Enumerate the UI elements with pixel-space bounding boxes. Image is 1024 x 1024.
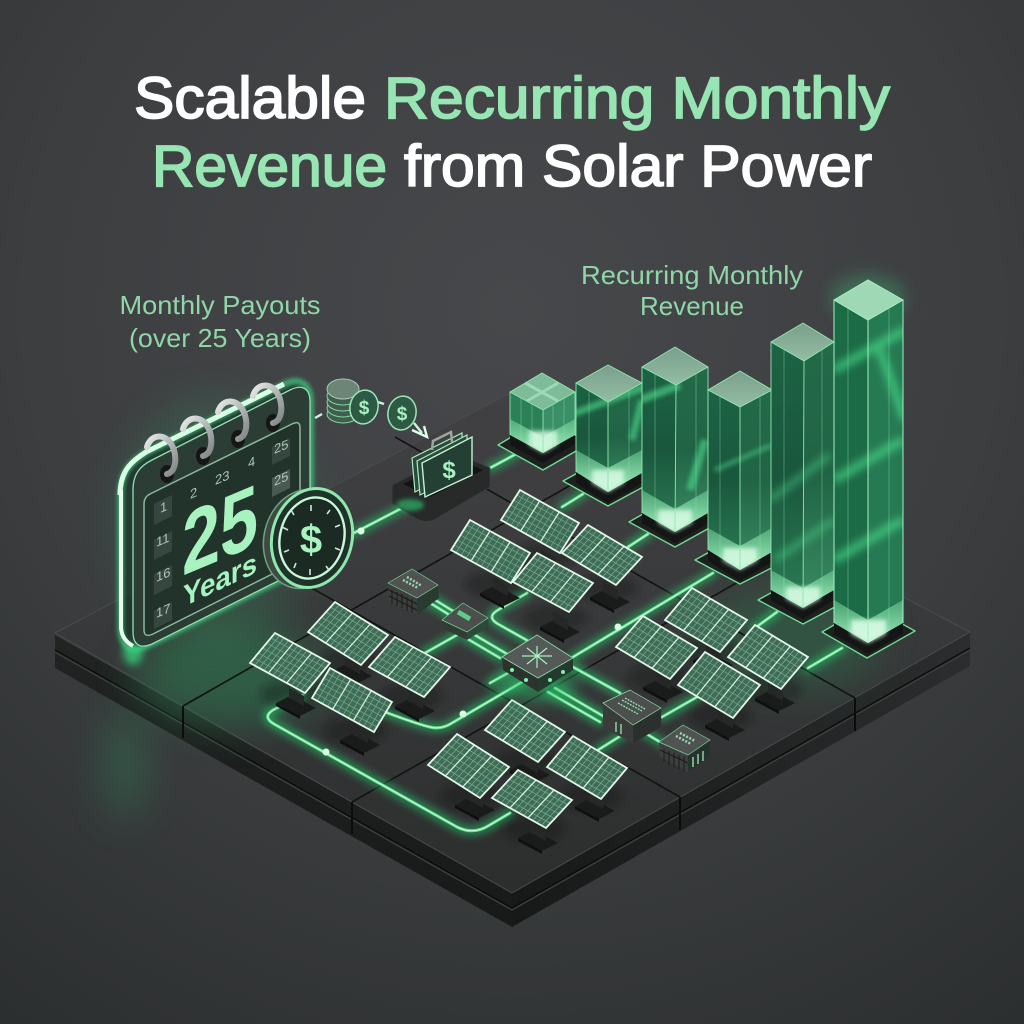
box: inverter B <box>442 603 488 640</box>
title: Revenue <box>152 134 387 199</box>
bar 5 <box>757 322 834 625</box>
dashed trail <box>315 402 422 433</box>
calendar date cells <box>154 438 290 629</box>
label: monthly payouts <box>120 290 320 353</box>
clock coin: $ <box>300 518 322 562</box>
arrow into briefcase <box>412 426 427 437</box>
platform <box>55 392 970 927</box>
label: recurring monthly revenue: Revenue <box>640 291 744 321</box>
calendar base glow <box>123 639 143 665</box>
clock coin <box>253 480 363 597</box>
calendar body <box>120 381 311 649</box>
bar 6 <box>822 274 915 658</box>
box: server D <box>659 725 710 772</box>
calendar dates: 17 <box>156 600 170 621</box>
solar array: bottom group <box>428 700 627 854</box>
bar chart: glass revenue columns <box>498 274 915 658</box>
calendar dates: 4 <box>248 453 256 471</box>
green floor reflection <box>105 710 145 820</box>
calendar dates: 16 <box>156 564 170 585</box>
glowing circuit wires <box>268 454 842 831</box>
calendar dates: 2 <box>190 484 197 502</box>
green glow on platform <box>135 625 325 725</box>
bar 1 <box>498 373 590 470</box>
label: recurring monthly revenue <box>581 260 803 321</box>
tray <box>392 452 490 522</box>
calendar dates: 25 <box>274 468 288 489</box>
bar 3 <box>628 346 709 548</box>
briefcase in tray <box>392 432 490 522</box>
briefcase: $ <box>442 457 456 484</box>
coin: $ <box>397 404 408 425</box>
solar array: left group <box>250 602 450 756</box>
calendar: 25 years <box>115 381 363 649</box>
calendar dates: 23 <box>215 467 229 488</box>
calendar dates: 11 <box>156 530 169 550</box>
calendar inner panel <box>144 423 300 635</box>
title: from Solar Power <box>404 134 872 199</box>
calendar dates: 25 <box>274 436 288 457</box>
big number 25: 25 <box>182 465 258 595</box>
calendar dates <box>156 436 288 621</box>
box: central hub <box>498 635 578 702</box>
box: inverter C <box>603 690 661 743</box>
calendar dates: 1 <box>160 498 167 516</box>
label: monthly payouts: (over 25 Years) <box>129 323 311 353</box>
label: recurring monthly revenue: Recurring Monthly <box>581 260 803 290</box>
calendar rings <box>147 385 281 483</box>
title <box>134 66 890 199</box>
green glow around columns <box>700 590 880 690</box>
label: monthly payouts: Monthly Payouts <box>120 290 320 320</box>
solar array: right group <box>616 588 808 741</box>
coin: $ <box>359 398 370 419</box>
solar array: top group <box>451 490 642 643</box>
box: server A <box>388 569 439 615</box>
years label: Years <box>183 545 257 614</box>
coins <box>315 379 427 437</box>
title: Recurring Monthly <box>384 66 890 131</box>
bar 2 <box>562 364 642 507</box>
bar 4 <box>694 370 771 585</box>
title: Scalable <box>134 66 366 131</box>
coin stack <box>327 379 359 423</box>
